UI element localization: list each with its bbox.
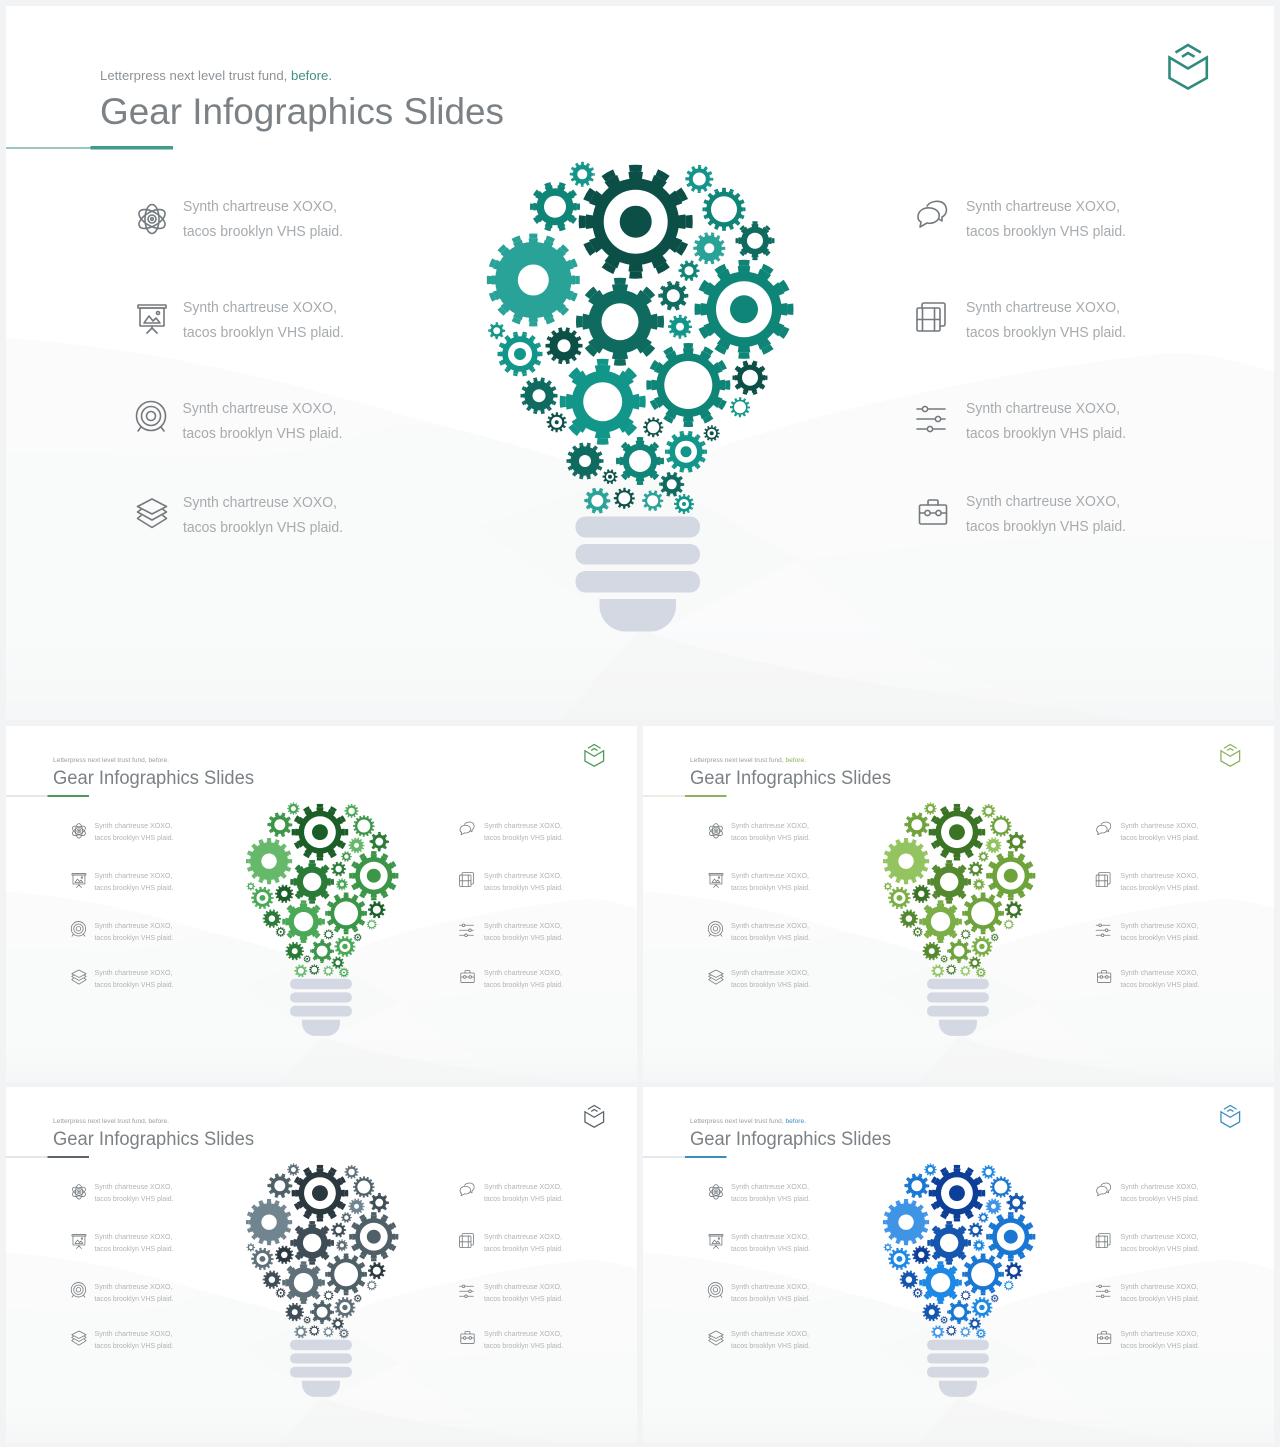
icon: film frames <box>1096 1234 1110 1248</box>
item texts: tacos brooklyn VHS plaid. <box>1120 982 1200 989</box>
right list <box>1096 822 1200 989</box>
item texts: tacos brooklyn VHS plaid. <box>731 885 810 892</box>
item texts <box>1120 1184 1200 1350</box>
item texts: Synth chartreuse XOXO, <box>731 1234 809 1241</box>
logo: cube icon <box>585 1106 604 1127</box>
item texts: tacos brooklyn VHS plaid. <box>94 1296 174 1303</box>
icon: film frames <box>460 873 473 887</box>
icon: briefcase <box>1097 1332 1111 1343</box>
icon: film frames <box>460 1234 473 1248</box>
item texts: Synth chartreuse XOXO, <box>731 970 809 977</box>
item text: tacos brooklyn VHS plaid. <box>182 426 342 442</box>
gear lightbulb <box>884 803 1034 1036</box>
tagline: Letterpress next level trust fund, before. <box>690 758 806 764</box>
icon: atom <box>136 204 168 234</box>
item texts: Synth chartreuse XOXO, <box>731 1331 809 1338</box>
item texts: Synth chartreuse XOXO, <box>484 1331 562 1338</box>
item texts: tacos brooklyn VHS plaid. <box>484 1196 563 1203</box>
item texts: tacos brooklyn VHS plaid. <box>1120 1246 1200 1253</box>
item texts: tacos brooklyn VHS plaid. <box>484 935 563 942</box>
item texts: Synth chartreuse XOXO, <box>484 823 562 830</box>
item texts: tacos brooklyn VHS plaid. <box>484 982 563 989</box>
title underline <box>6 1156 89 1158</box>
item texts: Synth chartreuse XOXO, <box>94 923 173 930</box>
item texts: tacos brooklyn VHS plaid. <box>731 1343 810 1350</box>
item text: tacos brooklyn VHS plaid. <box>183 325 344 341</box>
right list <box>917 199 1126 535</box>
heading block <box>6 758 254 797</box>
item texts: Synth chartreuse XOXO, <box>731 1184 809 1191</box>
gear cluster <box>489 163 791 513</box>
icon: chat bubbles <box>1097 1183 1111 1196</box>
item text: tacos brooklyn VHS plaid. <box>183 224 343 240</box>
item text: Synth chartreuse XOXO, <box>183 199 337 215</box>
item texts <box>94 823 174 989</box>
icon: layers <box>709 1331 723 1345</box>
item text <box>183 199 343 240</box>
left list <box>71 1184 174 1350</box>
icon: layers <box>138 499 166 528</box>
item texts: tacos brooklyn VHS plaid. <box>731 1196 810 1203</box>
item: chat <box>918 199 1126 240</box>
icon: presentation board <box>72 1235 86 1249</box>
left list <box>71 823 174 989</box>
item: sliders <box>917 401 1126 442</box>
title underline <box>643 1156 726 1158</box>
heading block <box>643 758 891 797</box>
title: Gear Infographics Slides <box>100 91 504 132</box>
item texts: Synth chartreuse XOXO, <box>484 1234 562 1241</box>
item texts: tacos brooklyn VHS plaid. <box>484 1296 563 1303</box>
slide background <box>6 726 637 1082</box>
item texts: Synth chartreuse XOXO, <box>731 873 809 880</box>
icon: target <box>708 922 723 936</box>
item texts: Synth chartreuse XOXO, <box>484 873 562 880</box>
heading block <box>6 1119 254 1158</box>
item texts: Synth chartreuse XOXO, <box>484 923 562 930</box>
gear lightbulb <box>884 1164 1034 1397</box>
title: Gear Infographics Slides <box>690 768 891 789</box>
item texts: tacos brooklyn VHS plaid. <box>731 1296 810 1303</box>
item texts: tacos brooklyn VHS plaid. <box>94 1343 174 1350</box>
tagline: Letterpress next level trust fund, before. <box>53 758 169 764</box>
icon: film frames <box>917 303 945 331</box>
item texts: Synth chartreuse XOXO, <box>94 1234 173 1241</box>
tagline: Letterpress next level trust fund, before. <box>100 68 332 83</box>
item text: tacos brooklyn VHS plaid. <box>966 325 1126 341</box>
slide background <box>643 1087 1274 1443</box>
item: film <box>917 300 1126 341</box>
heading block <box>6 68 504 150</box>
item: layers <box>138 495 343 536</box>
item texts: Synth chartreuse XOXO, <box>731 923 809 930</box>
item texts: tacos brooklyn VHS plaid. <box>731 982 810 989</box>
icon: target <box>708 1283 723 1297</box>
item texts: Synth chartreuse XOXO, <box>731 1284 809 1291</box>
item text <box>966 494 1126 535</box>
item text: Synth chartreuse XOXO, <box>183 495 337 511</box>
icon: sliders <box>460 924 473 937</box>
slide background <box>643 726 1274 1082</box>
right list <box>460 822 563 989</box>
heading block <box>643 1119 891 1158</box>
item texts: tacos brooklyn VHS plaid. <box>1120 885 1200 892</box>
item texts: tacos brooklyn VHS plaid. <box>94 885 174 892</box>
item text <box>183 495 343 536</box>
item texts: Synth chartreuse XOXO, <box>1120 873 1199 880</box>
item texts: tacos brooklyn VHS plaid. <box>1120 1296 1200 1303</box>
item: presentation <box>138 300 344 341</box>
item texts: tacos brooklyn VHS plaid. <box>484 835 563 842</box>
icon: sliders <box>917 406 945 432</box>
icon: chat bubbles <box>460 822 474 835</box>
tagline: Letterpress next level trust fund, before. <box>690 1119 806 1125</box>
item text <box>966 300 1126 341</box>
left list <box>136 199 344 536</box>
item text: tacos brooklyn VHS plaid. <box>966 519 1126 535</box>
title underline <box>643 795 726 797</box>
title underline <box>6 795 89 797</box>
item texts <box>731 823 810 989</box>
item texts: Synth chartreuse XOXO, <box>94 823 173 830</box>
icon: film frames <box>1096 873 1110 887</box>
gear lightbulb <box>247 1164 397 1397</box>
icon: presentation board <box>72 874 86 888</box>
right list <box>1096 1183 1200 1350</box>
right list <box>460 1183 563 1350</box>
item text: tacos brooklyn VHS plaid. <box>183 520 343 536</box>
item texts: tacos brooklyn VHS plaid. <box>1120 935 1200 942</box>
item texts: tacos brooklyn VHS plaid. <box>1120 1343 1200 1350</box>
item texts: Synth chartreuse XOXO, <box>1120 1234 1199 1241</box>
tagline: Letterpress next level trust fund, before. <box>53 1119 169 1125</box>
icon: chat bubbles <box>460 1183 474 1196</box>
item texts: Synth chartreuse XOXO, <box>484 970 562 977</box>
logo: cube icon <box>585 744 604 766</box>
panel: blue slide <box>643 1087 1274 1443</box>
item text <box>966 199 1126 240</box>
icon: briefcase <box>920 500 946 524</box>
title: Gear Infographics Slides <box>690 1129 891 1150</box>
title: Gear Infographics Slides <box>53 768 254 789</box>
icon: target <box>136 402 166 431</box>
item texts: Synth chartreuse XOXO, <box>94 1284 173 1291</box>
item text <box>182 401 342 442</box>
item texts: tacos brooklyn VHS plaid. <box>94 1196 174 1203</box>
panel: main teal slide <box>6 6 1274 720</box>
item texts: Synth chartreuse XOXO, <box>484 1184 562 1191</box>
icon: layers <box>72 1331 86 1345</box>
icon: atom <box>708 824 724 838</box>
title: Gear Infographics Slides <box>53 1129 254 1150</box>
icon: presentation board <box>709 874 723 888</box>
item texts: tacos brooklyn VHS plaid. <box>484 1343 563 1350</box>
item texts: tacos brooklyn VHS plaid. <box>1120 1196 1200 1203</box>
panel: slate slide <box>6 1087 637 1443</box>
item texts: tacos brooklyn VHS plaid. <box>731 835 810 842</box>
icon: atom <box>71 824 87 838</box>
item texts: tacos brooklyn VHS plaid. <box>1120 835 1200 842</box>
icon: sliders <box>460 1285 473 1298</box>
panel: green slide <box>6 726 637 1082</box>
icon: presentation board <box>709 1235 723 1249</box>
logo: cube icon <box>1170 45 1207 88</box>
item texts: Synth chartreuse XOXO, <box>94 1331 173 1338</box>
icon: briefcase <box>1097 970 1111 982</box>
item texts: Synth chartreuse XOXO, <box>1120 970 1199 977</box>
item text: Synth chartreuse XOXO, <box>966 401 1120 417</box>
item text: tacos brooklyn VHS plaid. <box>966 224 1126 240</box>
icon: chat bubbles <box>1097 822 1111 835</box>
item text: Synth chartreuse XOXO, <box>966 199 1120 215</box>
item texts <box>731 1184 810 1350</box>
item texts: tacos brooklyn VHS plaid. <box>94 935 174 942</box>
item text: Synth chartreuse XOXO, <box>182 401 336 417</box>
item texts <box>94 1184 174 1350</box>
item: briefcase <box>920 494 1126 535</box>
logo: cube icon <box>1221 1106 1240 1127</box>
item text: Synth chartreuse XOXO, <box>183 300 337 316</box>
item texts: tacos brooklyn VHS plaid. <box>731 1246 810 1253</box>
logo: cube icon <box>1221 744 1240 766</box>
item text: tacos brooklyn VHS plaid. <box>966 426 1126 442</box>
item texts: Synth chartreuse XOXO, <box>94 1184 173 1191</box>
item text: Synth chartreuse XOXO, <box>966 494 1120 510</box>
icon: target <box>71 1283 86 1297</box>
title underline <box>6 146 173 150</box>
icon: presentation board <box>138 305 166 333</box>
icon: layers <box>709 970 723 984</box>
item texts: Synth chartreuse XOXO, <box>1120 823 1199 830</box>
icon: briefcase <box>461 970 474 982</box>
item texts: Synth chartreuse XOXO, <box>94 873 173 880</box>
item texts: Synth chartreuse XOXO, <box>731 823 809 830</box>
icon: layers <box>72 970 86 984</box>
item texts: tacos brooklyn VHS plaid. <box>484 1246 563 1253</box>
item texts: Synth chartreuse XOXO, <box>94 970 173 977</box>
item: target <box>136 401 342 442</box>
item texts: Synth chartreuse XOXO, <box>484 1284 562 1291</box>
item texts <box>484 823 563 989</box>
left list <box>708 823 810 989</box>
bulb screw base <box>576 516 700 632</box>
item texts <box>1120 823 1200 989</box>
item texts: Synth chartreuse XOXO, <box>1120 1331 1199 1338</box>
slide background <box>6 1087 637 1443</box>
item texts: tacos brooklyn VHS plaid. <box>94 982 174 989</box>
icon: target <box>71 922 86 936</box>
gear lightbulb <box>489 163 791 632</box>
icon: sliders <box>1096 1285 1110 1298</box>
icon: atom <box>71 1185 87 1199</box>
slide background <box>6 6 1274 720</box>
item text <box>966 401 1126 442</box>
left list <box>708 1184 810 1350</box>
panel: light green slide <box>643 726 1274 1082</box>
item texts: Synth chartreuse XOXO, <box>1120 1284 1199 1291</box>
item: atom <box>136 199 343 240</box>
icon: atom <box>708 1185 724 1199</box>
gear lightbulb <box>247 803 397 1036</box>
icon: briefcase <box>461 1332 474 1343</box>
item text: Synth chartreuse XOXO, <box>966 300 1120 316</box>
item texts: tacos brooklyn VHS plaid. <box>94 1246 174 1253</box>
item texts: tacos brooklyn VHS plaid. <box>484 885 563 892</box>
item texts: Synth chartreuse XOXO, <box>1120 923 1199 930</box>
item texts: tacos brooklyn VHS plaid. <box>94 835 174 842</box>
item texts <box>484 1184 563 1350</box>
item text <box>183 300 344 341</box>
item texts: tacos brooklyn VHS plaid. <box>731 935 810 942</box>
icon: sliders <box>1096 924 1110 937</box>
icon: chat bubbles <box>918 201 946 227</box>
item texts: Synth chartreuse XOXO, <box>1120 1184 1199 1191</box>
